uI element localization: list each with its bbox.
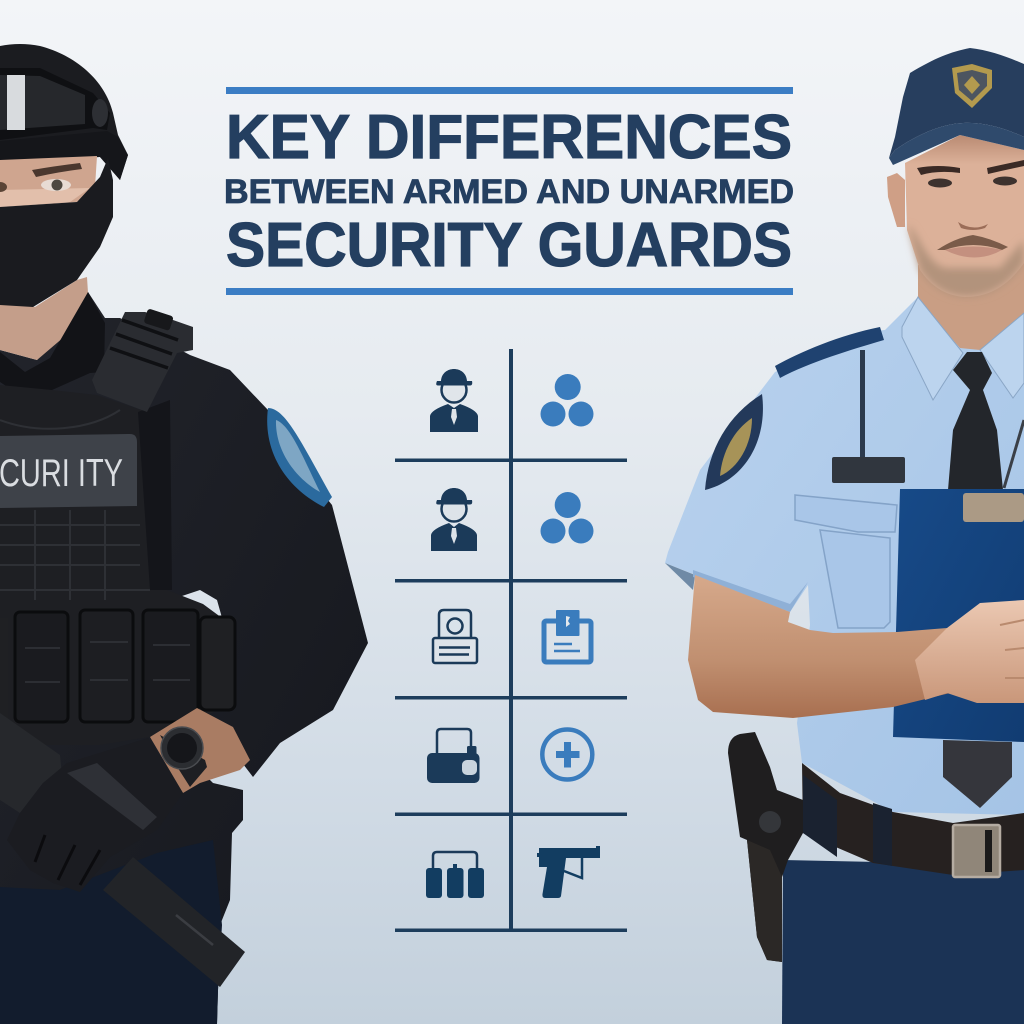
sleeve hem: [693, 570, 808, 612]
moustache: [937, 235, 1008, 250]
belt: [802, 763, 1024, 875]
icon: team circles row 1: [540, 374, 594, 426]
security chest patch: [0, 434, 137, 508]
icon: team circles row 2: [540, 492, 594, 544]
sleeve badge: [705, 394, 763, 490]
face: [905, 135, 1024, 297]
title line 3: SECURITY GUARDS: [226, 211, 792, 280]
pants: [0, 840, 222, 1024]
title block: [224, 87, 794, 295]
icon: radio: [427, 729, 480, 783]
cord: [860, 350, 865, 458]
wristwatch: [160, 727, 207, 787]
shirt collar: [902, 297, 1024, 400]
tactical helmet: [0, 44, 128, 180]
top rule: [226, 87, 793, 94]
tactical vest: [0, 385, 236, 745]
rifle magazine: [103, 857, 245, 987]
hand: [915, 600, 1024, 703]
belt buckle: [953, 825, 1000, 877]
mouth: [945, 246, 1002, 258]
photo: armed security guard: [0, 44, 368, 1024]
holster: [728, 732, 803, 962]
icon: first aid circle: [542, 730, 592, 780]
collar: [0, 292, 105, 395]
shirt: [665, 297, 1024, 815]
eyes: [928, 176, 1017, 188]
comparison icon grid: [395, 349, 627, 932]
title line 2: BETWEEN ARMED AND UNARMED: [224, 173, 794, 211]
wrist: [150, 708, 250, 793]
helmet brim band: [0, 131, 128, 180]
badge lanyard: [1004, 420, 1024, 488]
gloved hand: [7, 738, 183, 892]
neck: [0, 277, 88, 360]
lower tie: [943, 740, 1012, 808]
icon: armed guard person row 2: [431, 488, 477, 551]
icon: armed guard person row 1: [430, 369, 478, 432]
vest webbing: [0, 410, 150, 600]
eyebrow: [32, 163, 82, 177]
eye shadow and cheek light: [0, 188, 90, 207]
nose: [958, 222, 988, 230]
belt loop: [803, 775, 892, 866]
bottom rule: [226, 288, 793, 295]
necktie: [948, 352, 1003, 490]
grid lines: [395, 349, 627, 932]
title line 1: KEY DIFFERENCES: [226, 103, 792, 172]
face: [0, 156, 97, 207]
goggles: [0, 68, 110, 140]
photo: unarmed security guard: [665, 48, 1024, 1024]
pants: [782, 860, 1024, 1024]
clipboard: [893, 489, 1024, 742]
epaulet: [775, 327, 884, 378]
ammunition pouches: [0, 610, 235, 722]
pocket: [795, 495, 897, 628]
forearm and elbow: [688, 575, 950, 718]
stubble: [908, 225, 1024, 297]
ear: [887, 173, 905, 227]
fingers: [1000, 620, 1024, 678]
rifle upper section: [0, 713, 62, 813]
black sleeve and torso: [0, 292, 368, 1024]
eye: [41, 179, 71, 191]
eyebrows: [917, 160, 1024, 175]
cap brim: [889, 123, 1024, 165]
radio on shoulder: [92, 308, 193, 412]
icon: equipment belt pouches: [426, 852, 484, 898]
sleeve underside: [665, 563, 695, 590]
face mask: [0, 158, 113, 307]
neck: [918, 255, 1024, 350]
shoulder patch: [267, 408, 332, 507]
icon: handgun: [537, 846, 600, 898]
name tag: [832, 457, 905, 483]
cap badge: [952, 64, 992, 108]
left eye at edge: [0, 182, 7, 192]
icon: ID badge: [433, 610, 477, 663]
security chest patch: CURI ITY: [0, 452, 123, 495]
icon: clipboard report: [544, 610, 591, 662]
cap: [889, 48, 1024, 158]
vest strap: [138, 400, 172, 590]
